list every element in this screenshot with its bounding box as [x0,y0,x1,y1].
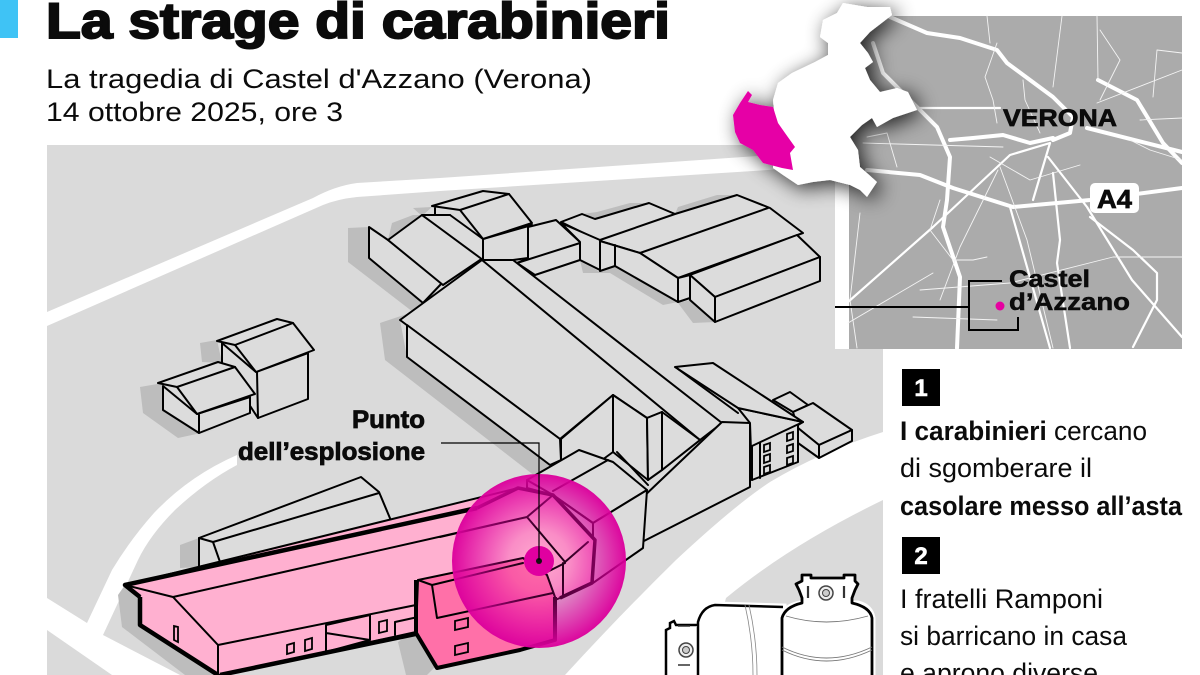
step 2 badge [902,537,940,574]
label: Castel d'Azzano: Castel [1009,266,1090,293]
marker: Castel d'Azzano [996,302,1004,310]
building: rear barn [199,477,392,567]
step 1 text: I carabinieri cercano [900,416,1147,446]
step 1 text: di sgomberare il [900,453,1092,483]
subtitle: La tragedia di Castel d'Azzano (Verona) [46,64,592,94]
step 1 badge [902,369,940,406]
subtitle: 14 ottobre 2025, ore 3 [46,97,343,127]
building shadows [118,195,737,675]
map: Veneto region [733,3,917,197]
label: Castel d'Azzano: d’Azzano [1009,289,1130,316]
map roads [848,16,1182,348]
building: upper complex [369,191,820,322]
Verona province [733,91,795,170]
label: explosion point: dell’esplosione [238,438,425,466]
step 2 badge: 2 [914,543,928,570]
building: left house [158,319,314,433]
label: Castel d'Azzano [1009,266,1130,316]
label: A4 motorway: A4 [1097,184,1133,214]
step 1 badge: 1 [914,375,928,402]
leader line: explosion [441,443,539,560]
panel: area map [835,16,1182,349]
label: Verona: VERONA [1003,105,1117,132]
building: main hall [400,260,750,543]
label: explosion point: Punto [352,406,425,434]
panel: site plan ground [47,145,883,675]
bracket and leader line [835,281,1018,330]
icon: gas cylinders [666,575,872,675]
roads on site plan [47,153,883,675]
building: connecting wing [527,450,648,583]
label: A4 motorway [1090,183,1139,214]
step 1 text [900,416,1183,521]
step 2 text [900,584,1128,675]
step 1 text: casolare messo all’asta [900,491,1183,521]
accent bar [0,0,18,38]
step 2 text: si barricano in casa [900,621,1128,651]
explosion sphere [452,474,626,648]
explosion point marker [524,546,554,576]
subtitle [46,64,592,127]
building: right house and annex [675,363,852,480]
step 2 text: I fratelli Ramponi [900,584,1103,614]
label: explosion point [238,406,425,466]
building: pink farmhouse [125,488,595,675]
